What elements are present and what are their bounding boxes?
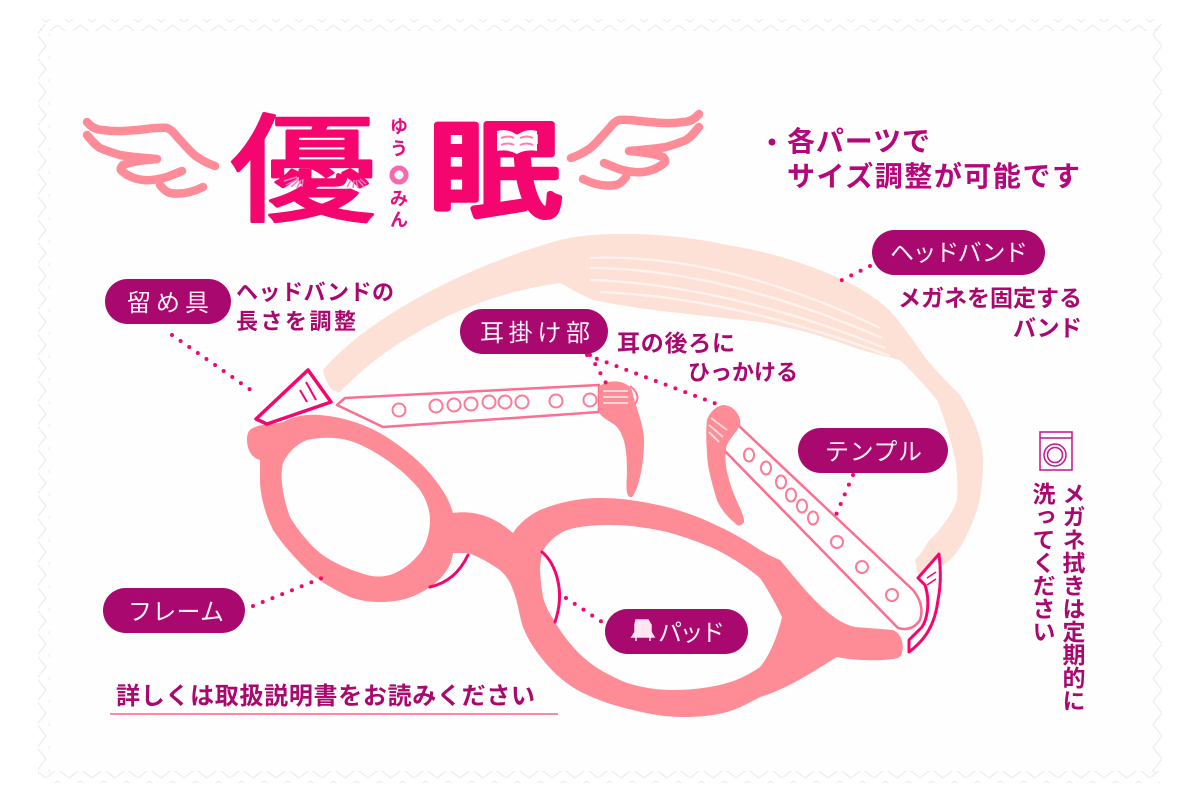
leader lines xyxy=(172,266,870,624)
caption: clasp: 長さを調整 xyxy=(236,309,356,334)
eyelashes xyxy=(284,177,366,188)
icon: flower xyxy=(392,168,406,182)
temple holes xyxy=(744,448,898,601)
title reading: み xyxy=(390,189,408,209)
vertical note column 1: メガネ拭きは定期的に xyxy=(1059,482,1085,712)
pill: headband xyxy=(872,230,1045,275)
icon: open book in kanji xyxy=(497,130,537,154)
right temple xyxy=(706,405,921,629)
pill: ear hook xyxy=(460,309,608,354)
title kanji: 優 xyxy=(230,106,376,238)
title kanji xyxy=(230,106,561,238)
vertical note column 2: 洗ってください xyxy=(1029,482,1055,643)
title kanji: 眠 xyxy=(428,112,561,232)
caption: headband xyxy=(898,285,1082,341)
caption: clasp: ヘッドバンドの xyxy=(236,280,394,305)
caption: headband: メガネを固定する xyxy=(898,285,1082,311)
glasses frame xyxy=(247,415,903,717)
pill: ear hook: 耳掛け部 xyxy=(480,320,590,347)
pill: pad: パッド xyxy=(658,620,725,647)
right ear hook xyxy=(706,405,744,526)
left ear hook xyxy=(599,381,644,497)
headband xyxy=(323,234,983,575)
note: adjustable parts: 各パーツで xyxy=(787,126,930,157)
title reading: う xyxy=(390,139,408,159)
right clip xyxy=(909,554,940,652)
title reading: ゆ xyxy=(390,117,408,137)
pill: temple: テンプル xyxy=(825,439,922,466)
icon: nose pad xyxy=(632,620,654,641)
left temple xyxy=(337,381,644,497)
pill: headband: ヘッドバンド xyxy=(890,240,1028,267)
left clip xyxy=(256,370,331,424)
pill: pad xyxy=(605,609,748,654)
pill: clasp xyxy=(105,279,231,324)
pill: clasp: 留め具 xyxy=(127,290,209,317)
right wing xyxy=(571,114,699,186)
caption: ear hook: 耳の後ろに xyxy=(617,330,735,356)
pill: frame xyxy=(103,588,245,633)
caption: clasp xyxy=(236,280,394,334)
pill: temple xyxy=(798,428,948,473)
pill: frame: フレーム xyxy=(128,599,224,626)
caption: ear hook xyxy=(617,330,798,385)
title reading xyxy=(390,117,408,230)
nose pads xyxy=(430,552,560,622)
caption: headband: バンド xyxy=(1013,315,1082,341)
note: adjustable parts: サイズ調整が可能です xyxy=(787,160,1080,192)
left wing xyxy=(87,122,215,194)
caption: ear hook: ひっかける xyxy=(688,360,798,385)
instruction note: 詳しくは取扱説明書をお読みください xyxy=(116,683,535,710)
note: adjustable parts xyxy=(768,126,1080,192)
band stripes xyxy=(590,258,890,356)
icon: washing machine xyxy=(1040,432,1072,470)
temple holes xyxy=(392,394,596,416)
title reading: ん xyxy=(390,210,408,230)
